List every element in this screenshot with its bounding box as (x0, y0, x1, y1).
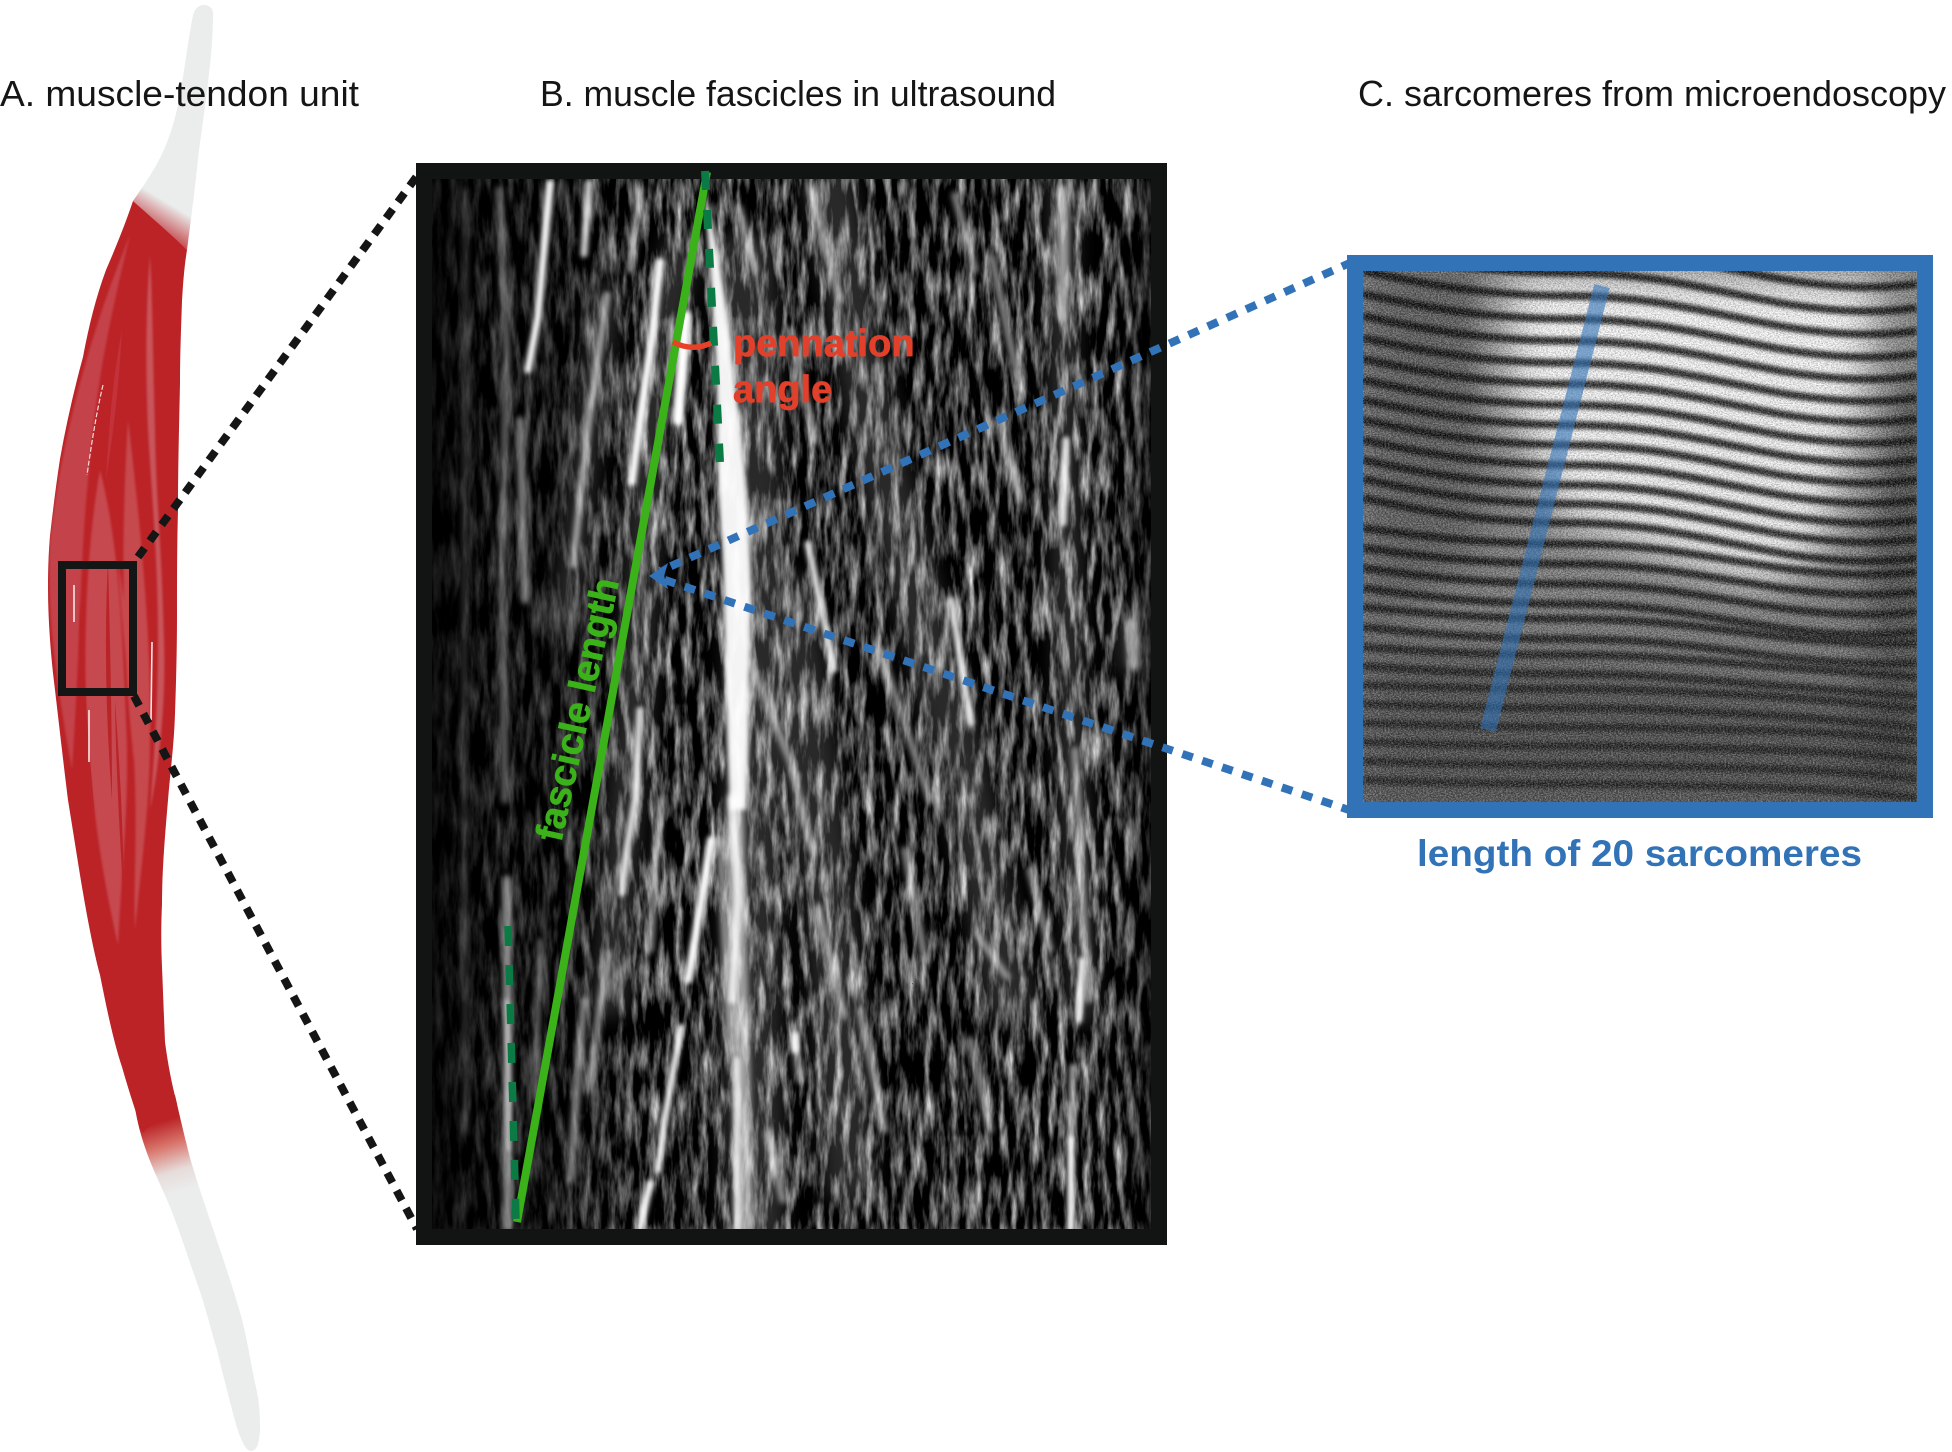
panel B: ultrasound image (416, 163, 1167, 1245)
lower tendon (135, 1095, 260, 1451)
heading C: C. sarcomeres from microendoscopy (1358, 73, 1946, 114)
blue frame (1347, 255, 1933, 818)
ultrasound image (432, 179, 1151, 1229)
panel A: muscle-tendon unit illustration (48, 5, 260, 1451)
pennation angle label: pennation (733, 323, 915, 365)
selection box on muscle (62, 565, 133, 692)
heading A: A. muscle-tendon unit (0, 73, 359, 114)
dotted zoom line lower (134, 696, 417, 1229)
dotted zoom line upper (138, 176, 417, 557)
green fascicle length line (517, 172, 707, 1222)
sarcomere dark bands lower (1363, 528, 1917, 798)
central bright band (704, 190, 751, 810)
sarcomere dark bands upper (1363, 271, 1917, 568)
upper tendon (133, 5, 213, 250)
fascicle length label: fascicle length (529, 574, 628, 845)
heading B: B. muscle fascicles in ultrasound (540, 73, 1056, 114)
bright streaks (507, 183, 1082, 1229)
bright and dark regions (1360, 260, 1930, 810)
blue dotted zoom line upper (660, 262, 1352, 571)
sarcomere caption: length of 20 sarcomeres (1417, 833, 1862, 874)
pennation angle arc (673, 342, 711, 347)
ultrasound frame (416, 163, 1167, 1245)
broad dim glows (563, 185, 1141, 1225)
muscle belly (48, 201, 187, 1133)
muscle fibres (49, 235, 164, 945)
panel C: microendoscopy image (1347, 200, 1933, 874)
blue dotted zoom line lower (662, 579, 1352, 811)
blue arrow head (649, 563, 668, 589)
pennation angle label: angle (733, 369, 832, 411)
length of 20 sarcomeres bar (1488, 286, 1602, 730)
dashed aponeurosis line upper (705, 171, 720, 462)
sarcomere image (1363, 271, 1917, 802)
dashed aponeurosis line lower (508, 926, 516, 1220)
medium streaks (464, 190, 1133, 1227)
